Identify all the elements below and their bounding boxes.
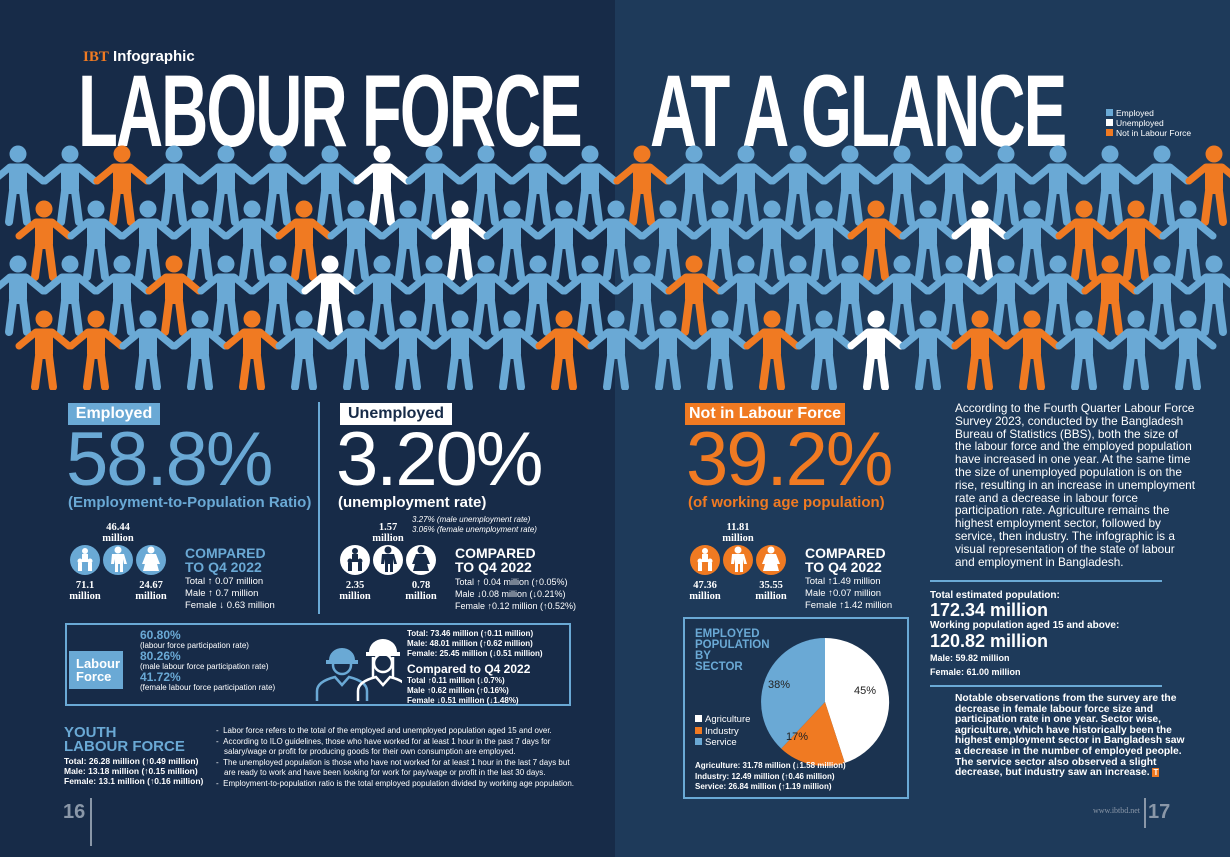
labour totals: Male ↑0.62 million (↑0.16%) xyxy=(407,686,509,695)
gender rates xyxy=(412,515,537,534)
labour totals: Compared to Q4 2022 xyxy=(407,662,530,676)
legend: Unemployed xyxy=(1116,118,1164,128)
intro paragraph: According to the Fourth Quarter Labour Force Survey 2023, conducted by the Bangladesh Bureau of Statistics (BBS), both the size of the labour force and the employed population have increased in one year. At the same time the size of unemployed population is on the rise, resulting in an increase in unemployment rate and a decrease in labour force participation rate. Agriculture remains the highest employment sector, followed by service, then industry. The infographic is a visual representation of the state of labour and employment in Bangladesh. xyxy=(955,401,1195,569)
compared block: Total ↑1.49 million xyxy=(805,576,881,587)
compared block: Total ↑ 0.07 million xyxy=(185,576,263,587)
pie chart: 38% xyxy=(768,679,790,691)
compared block: TO Q4 2022 xyxy=(185,559,262,575)
youth labour force: Male: 13.18 million (↑0.15 million) xyxy=(64,766,198,776)
definitions: - According to ILO guidelines, those who have worked for at least 1 hour in the past 7 days for salary/wage or profit for producing goods for their own consumption are employed. xyxy=(216,736,550,756)
panel: employed: 46.44 xyxy=(106,522,130,533)
icon group: employed people xyxy=(70,545,166,575)
labour totals: Total: 73.46 million (↑0.11 million) xyxy=(407,629,533,638)
panel: employed: 24.67 xyxy=(139,580,163,591)
panel: employed xyxy=(66,403,311,611)
compared block: TO Q4 2022 xyxy=(805,559,882,575)
legend: Employed xyxy=(1116,108,1154,118)
labour force label xyxy=(69,651,123,689)
unemployment caption: (unemployment rate) xyxy=(338,494,486,511)
pie chart: 45% xyxy=(854,685,876,697)
youth labour force: LABOUR FORCE xyxy=(64,738,185,755)
compared block: Female ↑0.12 million (↑0.52%) xyxy=(455,601,576,611)
participation rates: (labour force participation rate) (male labour force participation rate) (female labour force participation rate) xyxy=(140,641,275,692)
unemployed label xyxy=(340,403,452,425)
pie legend: Service xyxy=(705,737,737,748)
legend xyxy=(1106,108,1191,138)
panel: employed: million xyxy=(102,533,134,544)
participation rates: 60.80% xyxy=(140,628,181,642)
panel: not in labour force: million xyxy=(689,591,721,602)
compared block: Total ↑ 0.04 million (↑0.05%) xyxy=(455,577,568,587)
population stats: Total estimated population: xyxy=(930,590,1060,601)
icon group: unemployed people xyxy=(340,545,436,575)
panel: unemployed: million xyxy=(339,591,371,602)
compared block: COMPARED xyxy=(455,545,536,561)
not in labour force percentage: 39.2% xyxy=(686,417,892,502)
panel: labour force xyxy=(65,623,571,706)
participation rates: 80.26% xyxy=(140,649,181,663)
footer website and page 17: www.ibtbd.net xyxy=(1093,806,1140,815)
employed label xyxy=(68,403,160,425)
sector heading: POPULATION xyxy=(695,639,770,651)
labour totals xyxy=(407,629,543,705)
population stats: 172.34 million xyxy=(930,600,1048,620)
panel: unemployed xyxy=(336,403,576,611)
panel: unemployed: million xyxy=(372,533,404,544)
definitions: - The unemployed population is those who have not worked for at least 1 hour in the last 7 days but are ready to work and have been looking for work for pay/wage or profit in the last 30 days. xyxy=(216,758,570,777)
compared block xyxy=(805,545,892,611)
definitions: - Employment-to-population ratio is the total employed population divided by working age population. xyxy=(216,778,574,788)
right page background xyxy=(615,0,1230,857)
definitions xyxy=(216,726,574,788)
compared block xyxy=(185,545,275,611)
compared block: COMPARED xyxy=(185,545,266,561)
sector heading: EMPLOYED xyxy=(695,628,760,640)
sector figures: Service: 26.84 million (↑1.19 million) xyxy=(695,782,832,791)
panel: unemployed: 2.35 xyxy=(346,580,364,591)
population stats: 120.82 million xyxy=(930,631,1048,651)
brand: IBT Infographic: IBT Infographic xyxy=(83,48,195,65)
icon: workers xyxy=(316,639,402,701)
panel: unemployed: 0.78 xyxy=(412,580,430,591)
population stats xyxy=(930,580,1162,687)
labour totals: Female: 25.45 million (↓0.51 million) Total ↑0.11 million (↓0.7%) xyxy=(407,649,543,685)
pie chart xyxy=(761,638,890,766)
youth labour force: Female: 13.1 million (↑0.16 million) xyxy=(64,776,203,786)
panel: employed: 71.1 xyxy=(76,580,94,591)
sector heading: BY xyxy=(695,650,711,662)
compared block: TO Q4 2022 xyxy=(455,559,532,575)
not in labour force label: Not in Labour Force xyxy=(689,405,841,422)
population stats: Female: 61.00 million xyxy=(930,667,1021,677)
participation rates: 41.72% xyxy=(140,670,181,684)
icon group: orange people xyxy=(690,545,786,575)
title: AT A GLANCE xyxy=(650,54,1065,168)
page number 16: 16 xyxy=(63,801,85,823)
compared block: Male ↑0.07 million xyxy=(805,588,881,599)
compared block xyxy=(455,545,576,611)
employed percentage: 58.8% xyxy=(66,417,272,502)
compared block: Male ↓0.08 million (↓0.21%) xyxy=(455,589,566,599)
pie legend: Industry xyxy=(705,726,739,736)
people chain illustration xyxy=(0,146,1230,390)
labour totals: Female ↓0.51 million (↓1.48%) xyxy=(407,696,519,705)
unemployed label: Unemployed xyxy=(348,405,444,422)
pie chart: 17% xyxy=(786,731,808,743)
definitions: - Labor force refers to the total of the employed and unemployed population aged 15 and over. xyxy=(216,726,552,735)
sector figures: Agriculture: 31.78 million (↓1.58 million) xyxy=(695,761,846,770)
panel: not in labour force: million xyxy=(755,591,787,602)
panel: employed: million xyxy=(69,591,101,602)
panel: not in labour force: 47.36 xyxy=(693,580,717,591)
youth labour force xyxy=(64,724,203,786)
population stats: Male: 59.82 million xyxy=(930,653,1010,663)
youth labour force: YOUTH xyxy=(64,724,116,741)
pie legend xyxy=(695,714,750,748)
employed caption: (Employment-to-Population Ratio) xyxy=(68,494,311,511)
panel: unemployed: 1.57 xyxy=(379,522,397,533)
caption: (of working age population) xyxy=(688,494,885,511)
pie legend: Agriculture xyxy=(705,714,750,725)
compared block: Male ↑ 0.7 million xyxy=(185,588,258,599)
title xyxy=(78,54,1065,168)
panel: employed population by sector xyxy=(683,617,909,799)
youth labour force: Total: 26.28 million (↑0.49 million) xyxy=(64,756,198,766)
labour force label: Force xyxy=(76,669,111,684)
compared block: Female ↑1.42 million xyxy=(805,600,892,611)
population stats: Working population aged 15 and above: xyxy=(930,620,1119,631)
sector heading: SECTOR xyxy=(695,661,743,673)
panel: not in labour force: million xyxy=(722,533,754,544)
compared block: COMPARED xyxy=(805,545,886,561)
gender rates: 3.27% (male unemployment rate) xyxy=(412,515,530,524)
unemployment percentage: 3.20% xyxy=(336,417,542,502)
panel: not in labour force: 11.81 xyxy=(726,522,750,533)
labour force label: Labour xyxy=(76,656,120,671)
sector figures: Industry: 12.49 million (↑0.46 million) xyxy=(695,772,835,780)
sector figures xyxy=(695,761,846,791)
employed label: Employed xyxy=(76,405,152,422)
gender rates: 3.06% (female unemployment rate) xyxy=(412,525,537,534)
text: 17 xyxy=(1148,801,1170,823)
panel: unemployed: million xyxy=(405,591,437,602)
panel: employed: million xyxy=(135,591,167,602)
title: LABOUR FORCE xyxy=(78,54,581,168)
compared block: Female ↓ 0.63 million xyxy=(185,600,275,611)
labour totals: Male: 48.01 million (↑0.62 million) xyxy=(407,639,533,648)
panel: not in labour force xyxy=(685,403,892,611)
sector heading xyxy=(695,628,770,673)
panel: not in labour force: 35.55 xyxy=(759,580,783,591)
notable observations: Notable observations from the survey are the decrease in female labour force size and participation rate in one year. Sector wise, agriculture, which have historically been the highest employment sector in Bangladesh saw a decrease in the number of employed people. The service sector also observed a slight decrease, but industry saw an increase. T xyxy=(955,693,1184,778)
legend: Not in Labour Force xyxy=(1116,128,1191,138)
